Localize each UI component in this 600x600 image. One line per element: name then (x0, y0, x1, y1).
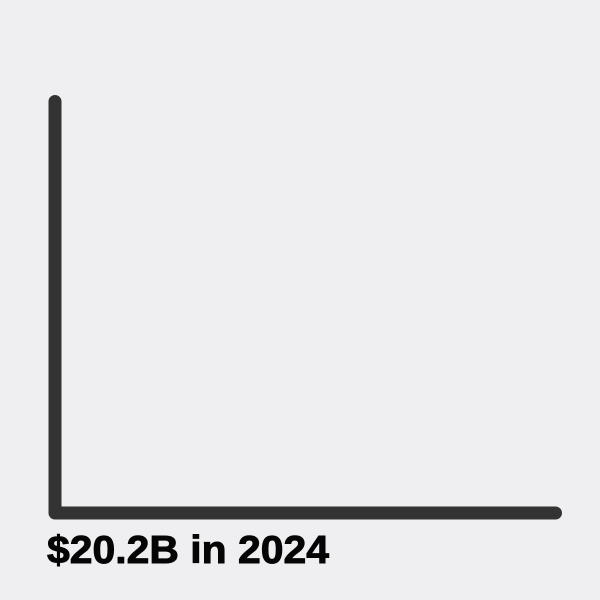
axes: vertical and horizontal L-shaped lines (55, 102, 556, 513)
caption: value and year: $20.2B in 2024 (47, 529, 330, 572)
